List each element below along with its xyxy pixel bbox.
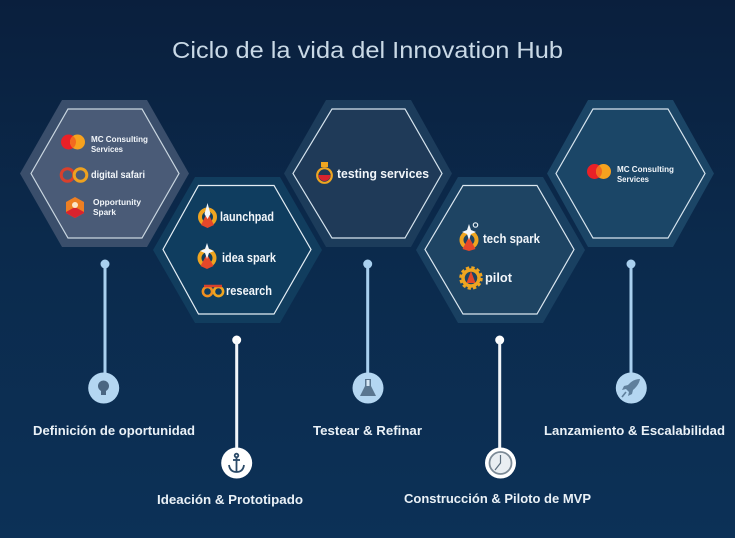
text: pilot: pilot [485,271,513,285]
icon: mastercard [61,134,85,150]
panel: hexagon definición [20,100,189,247]
text: Opportunity Spark: Opportunity [93,198,142,207]
icon: opportunity spark [66,197,84,218]
text: research: research [226,284,272,298]
text: MC Consulting Services: Services [617,175,650,184]
panel: hexagon testear [284,100,452,247]
step 5 connector and rocket icon [616,260,647,404]
icon: digital safari [61,169,87,181]
text: MC Consulting Services: MC Consulting [91,135,148,144]
icon: tech spark [462,223,478,251]
panel: hexagon lanzamiento [547,100,714,247]
title: Ciclo de la vida del Innovation Hub [172,37,563,63]
text: digital safari: digital safari [91,170,145,181]
step 3 connector and flask icon [352,260,384,404]
icon: mastercard [587,164,611,179]
panel: hexagon ideación [153,177,322,323]
panel: hexagon construcción [416,177,585,323]
text: Opportunity Spark: Spark [93,208,117,217]
text: launchpad: launchpad [220,210,274,224]
step 4 connector and clock icon [485,336,516,478]
icon: research binoculars [203,286,223,296]
text: MC Consulting Services: MC Consulting [617,165,674,174]
label: Testear & Refinar: Testear & Refinar [313,424,422,438]
label: Ideación & Prototipado: Ideación & Prototipado [157,493,303,507]
step 2 connector and anchor icon [221,336,252,478]
icon: pilot gear [460,268,482,288]
icon: launchpad [200,203,215,228]
text: testing services: testing services [337,167,429,181]
text: MC Consulting Services: Services [91,145,124,154]
label: Construcción & Piloto de MVP: Construcción & Piloto de MVP [404,492,591,506]
text: idea spark: idea spark [222,251,276,265]
step 1 connector and bulb icon [88,260,119,404]
text: tech spark: tech spark [483,232,540,246]
label: Lanzamiento & Escalabilidad: Lanzamiento & Escalabilidad [544,424,725,438]
icon: testing flask [317,162,332,183]
label: Definición de oportunidad: Definición de oportunidad [33,424,195,438]
icon: idea spark [200,243,214,269]
